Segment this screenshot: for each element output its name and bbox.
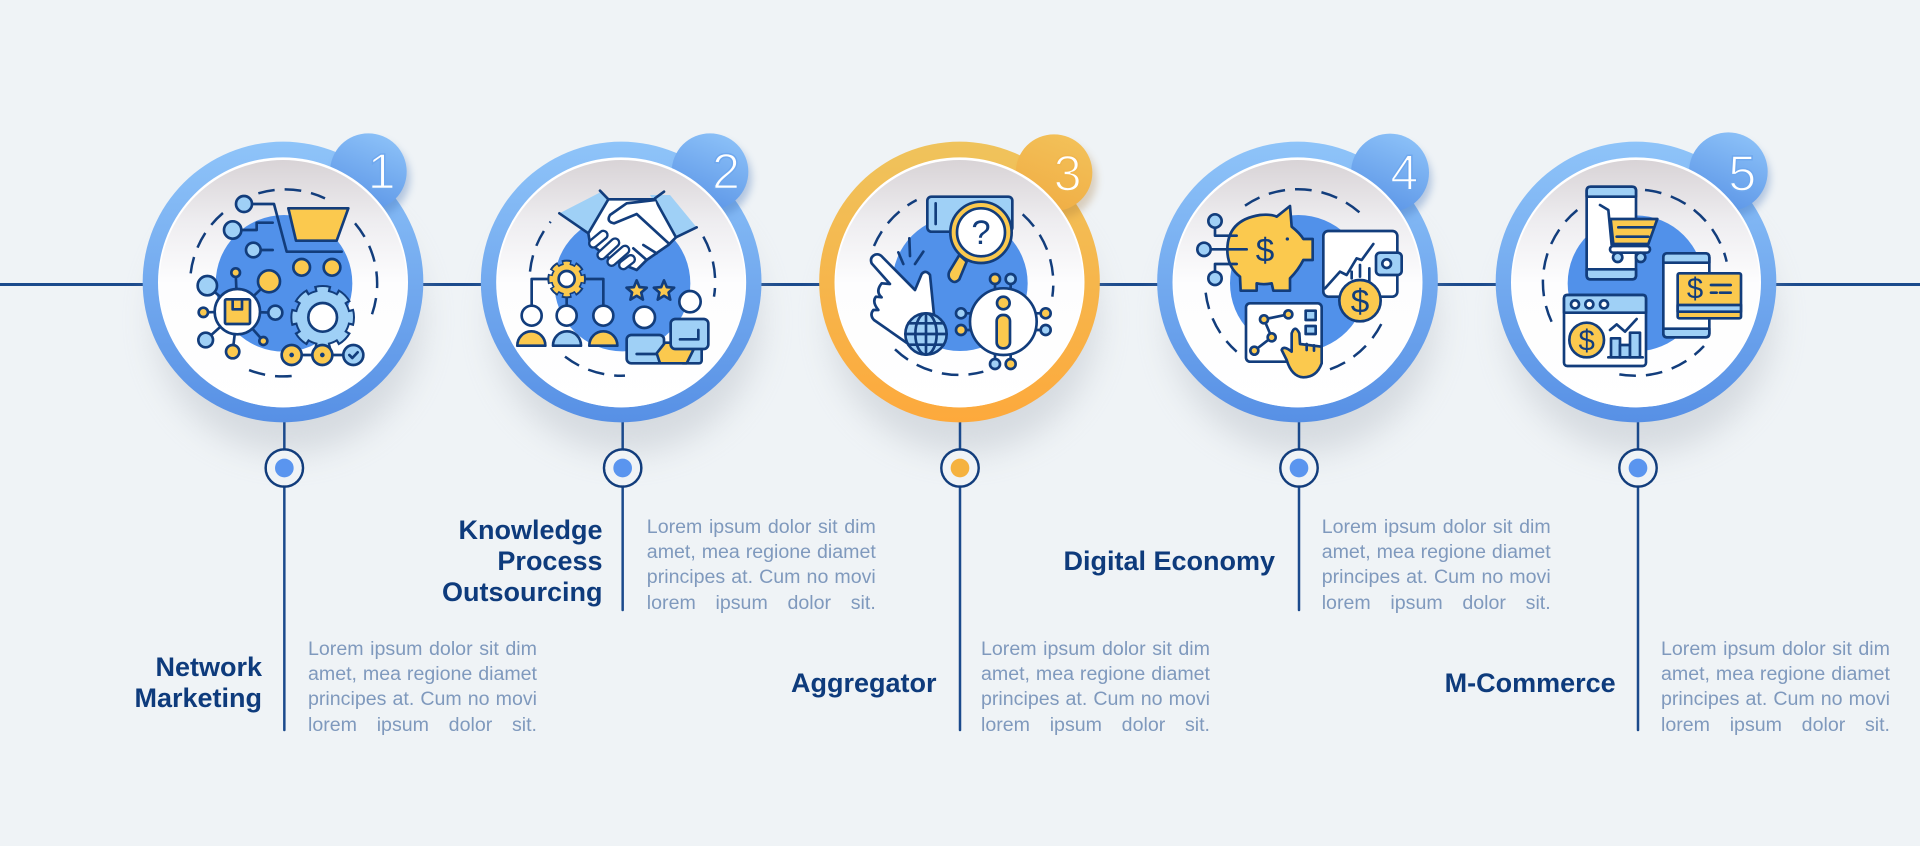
text block: description 5: principes at. Cum no movi	[1661, 688, 1890, 710]
title: Digital Economy: Digital Economy	[1063, 546, 1275, 576]
ring	[143, 142, 423, 422]
step 3 graphic: badge, ring, icon, connector	[818, 134, 1110, 732]
number 3: 3	[1054, 146, 1082, 202]
number 1: 1	[368, 143, 396, 199]
text block: description 1: amet, mea regione diamet	[308, 663, 537, 685]
icon: knowledge process outsourcing	[517, 191, 715, 376]
connector line with marker	[1280, 420, 1318, 610]
title: M-Commerce: M-Commerce	[1445, 668, 1616, 698]
ring	[481, 142, 762, 422]
horizontal timeline line	[0, 283, 1920, 286]
icon: aggregator	[871, 197, 1053, 375]
number badge 5	[1689, 132, 1768, 211]
text block: description 2: amet, mea regione diamet	[647, 541, 876, 563]
icon: digital economy: $	[1351, 283, 1369, 320]
number 2: 2	[712, 143, 740, 199]
connector line with marker	[1619, 420, 1657, 730]
text block: description 5: lorem ipsum dolor sit.	[1661, 714, 1890, 736]
connector line with marker	[941, 420, 979, 730]
step 5 graphic: badge, ring, icon, connector	[1494, 132, 1786, 732]
connector line with marker	[266, 420, 303, 730]
text block: description 1: lorem ipsum dolor sit.	[308, 714, 537, 736]
text block: description 5: amet, mea regione diamet	[1661, 663, 1890, 685]
text block: description 1	[308, 638, 537, 736]
text block: description 4: lorem ipsum dolor sit.	[1322, 592, 1551, 614]
icon: digital economy	[1197, 189, 1402, 377]
title: Aggregator: Aggregator	[791, 668, 936, 698]
step 1 graphic: badge, ring, icon, connector	[142, 133, 434, 732]
title: Network Marketing: Marketing	[134, 683, 262, 713]
text block: description 2: Lorem ipsum dolor sit dim	[647, 516, 876, 538]
text block: description 3: amet, mea regione diamet	[981, 663, 1210, 685]
text block: description 2: principes at. Cum no movi	[647, 566, 876, 588]
panel: step 2 Knowledge Process Outsourcing	[442, 133, 876, 614]
step 4 graphic: badge, ring, icon, connector	[1156, 134, 1448, 612]
title: Network Marketing: Network	[155, 652, 262, 682]
icon: network marketing	[191, 189, 377, 376]
panel: step 3 Aggregator	[791, 134, 1210, 736]
text block: description 5: Lorem ipsum dolor sit dim	[1661, 638, 1890, 660]
number badge 2	[672, 133, 748, 210]
icon: aggregator: ?	[971, 214, 991, 252]
text block: description 3: principes at. Cum no movi	[981, 688, 1210, 710]
icon: m-commerce: $	[1687, 273, 1703, 306]
number badge 3	[1016, 134, 1092, 211]
icon: m-commerce	[1543, 187, 1741, 376]
ring	[1157, 142, 1438, 422]
text block: description 4: principes at. Cum no movi	[1322, 566, 1551, 588]
connector line with marker	[604, 420, 641, 610]
text block: description 3: Lorem ipsum dolor sit dim	[981, 638, 1210, 660]
text block: description 4	[1322, 516, 1551, 614]
title: Knowledge Process Outsourcing	[442, 515, 602, 607]
text block: description 3	[981, 638, 1210, 736]
text block: description 2: lorem ipsum dolor sit.	[647, 592, 876, 614]
number 4: 4	[1390, 145, 1418, 201]
text block: description 2	[647, 516, 876, 614]
icon: m-commerce: $	[1579, 325, 1595, 358]
text block: description 4: Lorem ipsum dolor sit dim	[1322, 516, 1551, 538]
panel: step 1 Network Marketing	[134, 133, 537, 736]
number badge 4	[1351, 134, 1429, 212]
ring	[819, 142, 1100, 422]
title: Knowledge Process Outsourcing: Process	[497, 546, 602, 576]
step 2 graphic: badge, ring, icon, connector	[480, 133, 772, 612]
panel: step 5 M-Commerce	[1445, 132, 1890, 736]
number badge 1	[330, 133, 407, 210]
panel: step 4 Digital Economy	[1063, 134, 1551, 614]
text block: description 1: Lorem ipsum dolor sit dim	[308, 638, 537, 660]
icon: digital economy: $	[1256, 233, 1274, 270]
ring	[1496, 142, 1776, 422]
title: Knowledge Process Outsourcing: Outsourcing	[442, 577, 602, 607]
title: Knowledge Process Outsourcing: Knowledge	[458, 515, 602, 545]
title: Network Marketing	[134, 652, 262, 713]
text block: description 5	[1661, 638, 1890, 736]
text block: description 3: lorem ipsum dolor sit.	[981, 714, 1210, 736]
text block: description 4: amet, mea regione diamet	[1322, 541, 1551, 563]
text block: description 1: principes at. Cum no movi	[308, 688, 537, 710]
number 5: 5	[1728, 146, 1756, 202]
